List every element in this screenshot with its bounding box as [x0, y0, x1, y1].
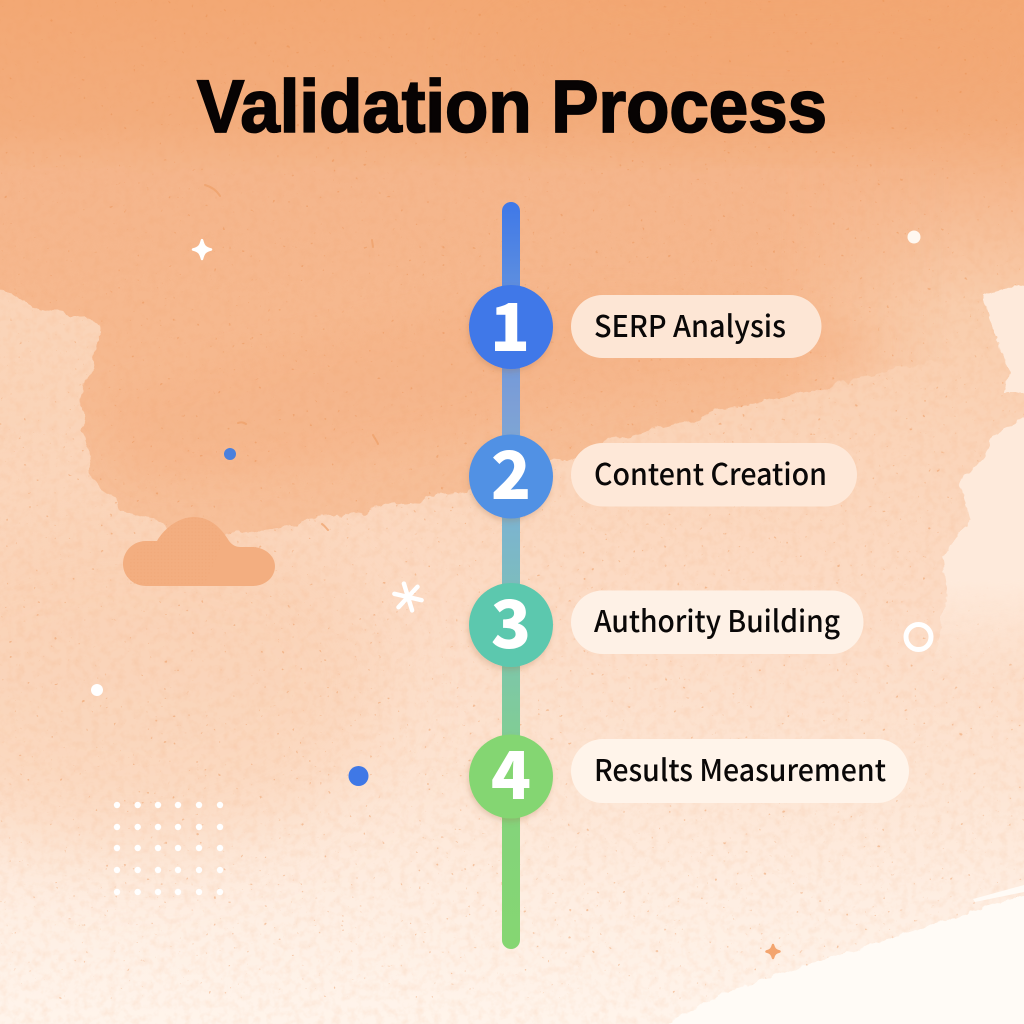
decorative ring: [906, 624, 931, 650]
timeline line: [502, 202, 520, 949]
step 2 label pill: [571, 443, 857, 506]
step 1 label: SERP Analysis: [594, 302, 786, 346]
step 3 badge: [469, 583, 553, 667]
step 3 label: Authority Building: [594, 597, 840, 641]
step 4 label: Results Measurement: [594, 746, 886, 790]
decorative white dot: [91, 684, 103, 696]
step 4 label pill: [571, 739, 909, 803]
icon: cloud: [123, 517, 275, 586]
decorative orange sparkle: [766, 945, 780, 958]
step 3: [469, 572, 864, 668]
step 2 badge: [469, 434, 553, 518]
step 1 badge: [469, 285, 553, 369]
decorative dot top right: [908, 230, 920, 244]
step 1 number: 1: [490, 275, 530, 371]
decorative blue dot lower: [348, 766, 368, 786]
step 4 badge: [469, 734, 553, 818]
step 1 label pill: [571, 295, 822, 358]
step 4: [469, 723, 909, 819]
step 1: [469, 275, 822, 371]
decorative blue dot: [224, 448, 236, 460]
step 4 number: 4: [491, 723, 531, 819]
step 3 number: 3: [491, 572, 531, 668]
step 2: [469, 423, 857, 519]
step 2 label: Content Creation: [594, 450, 827, 494]
decorative asterisk: [392, 580, 424, 614]
step 3 label pill: [571, 590, 864, 654]
title: Validation Process: [197, 65, 827, 148]
step 2 number: 2: [491, 423, 531, 519]
dot grid: [114, 802, 223, 895]
decorative sparkle top left: [193, 240, 211, 259]
